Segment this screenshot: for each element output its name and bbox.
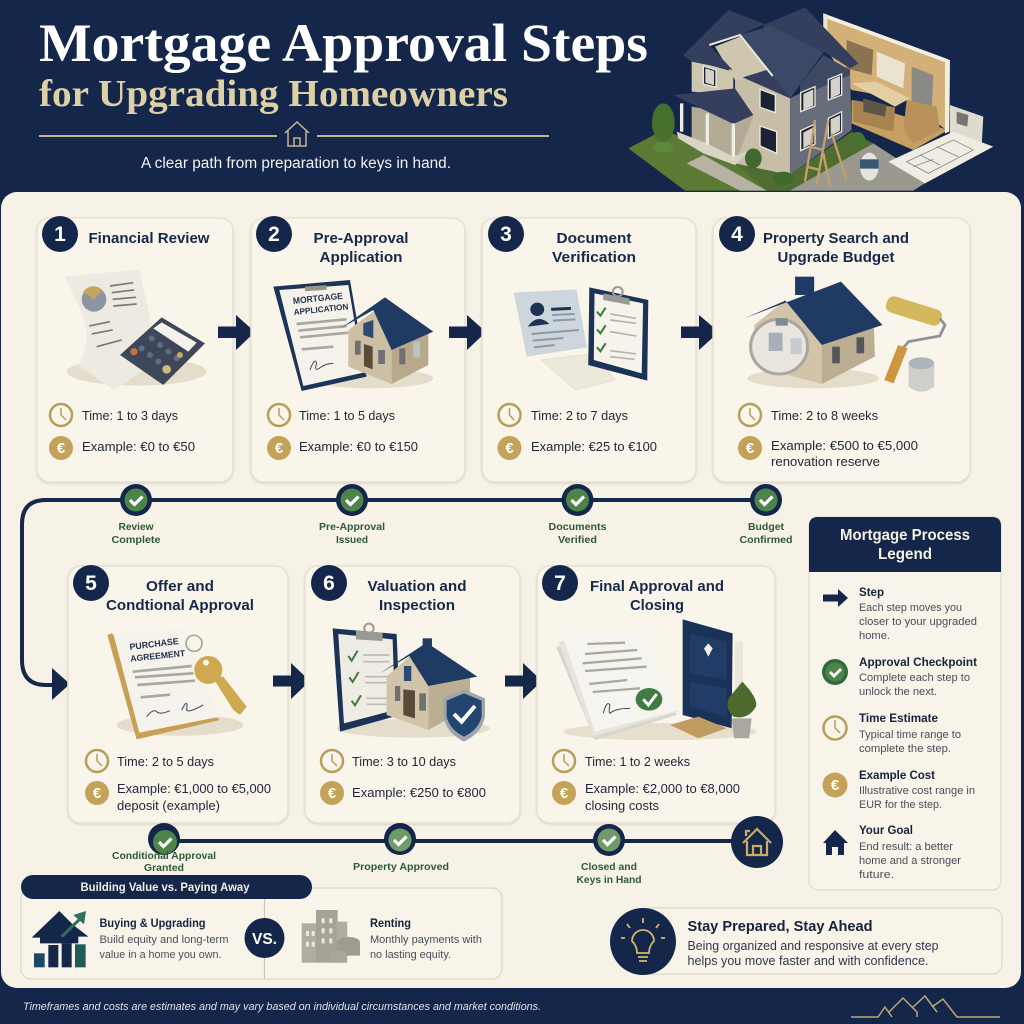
legend: example cost — [822, 768, 975, 811]
step 2 title: Pre-Approval — [314, 230, 408, 247]
panel: legend — [809, 517, 1001, 890]
step 6 title: Inspection — [379, 597, 455, 614]
vs badge: VS. — [252, 931, 277, 948]
cost: Example: €250 to €800 — [352, 785, 486, 800]
icon: clock — [553, 750, 575, 772]
renting text: no lasting equity. — [370, 949, 451, 961]
legend: approval checkpoint: Approval Checkpoint — [859, 655, 977, 669]
checkpoint: documents verified — [548, 484, 607, 546]
time: Time: 1 to 3 days — [82, 408, 178, 423]
step 1 number: 1 — [54, 223, 66, 246]
step 3 title: Document — [556, 230, 632, 247]
step 1 number — [42, 216, 78, 252]
checkpoint: documents verified: Documents — [548, 521, 607, 533]
step 7 card — [537, 565, 775, 823]
callout body: Being organized and responsive at every step — [688, 939, 939, 953]
buying text: Buying & Upgrading — [100, 918, 206, 930]
subtitle: for Upgrading Homeowners — [39, 73, 508, 115]
checkpoint: closed and keys in hand: Keys in Hand — [576, 874, 642, 886]
time: Time: 2 to 8 weeks — [771, 408, 878, 423]
legend: example cost: EUR for the step. — [859, 799, 942, 811]
tagline: A clear path from preparation to keys in hand. — [141, 155, 451, 172]
step 6 title — [368, 578, 466, 614]
cost: Example: €2,000 to €8,000 — [585, 781, 740, 796]
icon: euro: € — [746, 440, 755, 457]
step 2 number — [256, 216, 292, 252]
checkpoint: conditional approval granted — [112, 823, 216, 874]
step 3 number — [488, 216, 524, 252]
step 2 number: 2 — [268, 223, 280, 246]
step 2 title: Application — [320, 249, 402, 266]
cost — [117, 781, 271, 813]
checkpoint: review complete — [112, 484, 161, 546]
cost — [585, 781, 740, 813]
time: Time: 2 to 5 days — [117, 754, 214, 769]
checkpoint: review complete: Complete — [112, 534, 161, 546]
cost: Example: €1,000 to €5,000 — [117, 781, 271, 796]
icon: home goal — [731, 816, 783, 868]
icon: euro — [552, 781, 576, 805]
callout heading: Stay Prepared, Stay Ahead — [688, 918, 872, 935]
cost: deposit (example) — [117, 798, 220, 813]
checkpoint: review complete: Review — [118, 521, 154, 533]
checkpoint: budget confirmed: Confirmed — [740, 534, 792, 546]
icon: euro: € — [57, 440, 66, 457]
arrow: into step 5 — [52, 668, 70, 700]
step 5 number — [73, 565, 109, 601]
checkpoint: property approved: Property Approved — [353, 861, 449, 873]
icon: purchase agreement and key: PURCHASE — [129, 636, 179, 652]
comparison header: Building Value vs. Paying Away — [80, 882, 250, 894]
icon: euro: € — [505, 440, 514, 457]
legend: your goal: future. — [859, 869, 894, 881]
flow connector row 2 — [150, 839, 750, 843]
icon: euro — [267, 436, 291, 460]
arrow: step 6 to 7 — [505, 663, 542, 699]
icon: clock — [498, 404, 520, 426]
icon: clock — [321, 750, 343, 772]
legend: time estimate: Typical time range to — [859, 729, 961, 741]
legend header: Legend — [878, 546, 932, 563]
icon: application and house — [273, 280, 433, 391]
step 3 title: Verification — [552, 249, 636, 266]
icon: clock — [268, 404, 290, 426]
legend: example cost: € — [831, 777, 840, 794]
buying text: value in a home you own. — [100, 949, 222, 961]
checkpoint: budget confirmed — [740, 484, 792, 546]
checkpoint: closed and keys in hand — [576, 824, 642, 886]
renting text: Renting — [370, 918, 411, 930]
illustration: house under renovation — [628, 7, 993, 191]
legend: approval checkpoint — [822, 655, 977, 698]
icon: euro: € — [560, 785, 569, 802]
legend: step: closer to your upgraded — [859, 616, 977, 628]
time: Time: 3 to 10 days — [352, 754, 456, 769]
main cream panel — [1, 192, 1021, 988]
icon: application and house: MORTGAGE — [292, 291, 343, 306]
legend: time estimate: complete the step. — [859, 743, 951, 755]
legend: your goal: home and a stronger — [859, 855, 961, 867]
step 5 title — [106, 578, 254, 614]
step 1 card — [37, 216, 233, 482]
step 7 title: Final Approval and — [590, 578, 724, 595]
icon: euro: € — [328, 785, 337, 802]
icon: purchase agreement and key: AGREEMENT — [130, 648, 186, 664]
icon: document and calculator — [65, 269, 207, 390]
flow connector row 1 — [22, 500, 766, 685]
arrow: step 5 to 6 — [273, 663, 310, 699]
legend: step: Step — [859, 585, 884, 599]
arrow: step 2 to 3 — [449, 315, 486, 350]
arrow: step 1 to 2 — [218, 315, 255, 350]
icon: rental buildings and coins — [302, 910, 360, 963]
header — [39, 7, 993, 191]
checkpoint: closed and keys in hand: Closed and — [581, 861, 637, 873]
checkpoint: pre-approval issued — [319, 484, 385, 546]
checkpoint: budget confirmed: Budget — [748, 521, 784, 533]
icon: clock — [50, 404, 72, 426]
step 5 number: 5 — [85, 572, 97, 595]
legend: your goal — [823, 823, 961, 881]
time: Time: 2 to 7 days — [531, 408, 628, 423]
icon: euro — [49, 436, 73, 460]
vs badge — [244, 918, 284, 958]
buying text — [100, 918, 228, 961]
icon: id and checklist — [514, 287, 648, 390]
step 6 title: Valuation and — [368, 578, 466, 595]
step 4 number — [719, 216, 755, 252]
step 6 number: 6 — [323, 572, 335, 595]
step 7 title — [590, 578, 724, 614]
icon: clock — [86, 750, 108, 772]
step 4 number: 4 — [731, 223, 743, 246]
comparison header — [21, 875, 312, 899]
legend: example cost: Example Cost — [859, 768, 935, 782]
step 6 number — [311, 565, 347, 601]
icon: clipboard, house and shield — [333, 624, 490, 742]
legend: step: Each step moves you — [859, 602, 962, 614]
cost: renovation reserve — [771, 454, 880, 469]
cost: Example: €25 to €100 — [531, 439, 657, 454]
step 3 title — [552, 230, 636, 266]
time: Time: 1 to 5 days — [299, 408, 395, 423]
cost: Example: €0 to €50 — [82, 439, 195, 454]
legend: step — [823, 585, 977, 642]
checkpoint: documents verified: Verified — [558, 534, 597, 546]
step 5 title: Offer and — [146, 578, 214, 595]
icon: footer skyline — [851, 996, 1000, 1017]
step 4 title: Upgrade Budget — [778, 249, 895, 266]
cost: Example: €500 to €5,000 — [771, 438, 918, 453]
checkpoint: property approved — [353, 823, 449, 873]
step 2 card — [251, 216, 465, 482]
legend header: Mortgage Process — [840, 527, 970, 544]
legend: time estimate: Time Estimate — [859, 711, 938, 725]
icon: euro — [498, 436, 522, 460]
icon: lightbulb — [610, 908, 676, 975]
checkpoint: conditional approval granted: Granted — [144, 862, 184, 874]
icon: purchase agreement and key — [107, 628, 247, 739]
renting text: Monthly payments with — [370, 934, 482, 946]
footer disclaimer: Timeframes and costs are estimates and may vary based on individual circumstances and market conditions. — [23, 1001, 541, 1013]
cost: Example: €0 to €150 — [299, 439, 418, 454]
step 4 title: Property Search and — [763, 230, 909, 247]
renting text — [370, 918, 482, 961]
callout body: helps you move faster and with confidence. — [688, 954, 928, 968]
step 3 card — [482, 216, 696, 482]
icon: house with growth chart — [32, 911, 88, 967]
icon: euro — [320, 781, 344, 805]
step 5 title: Condtional Approval — [106, 597, 254, 614]
icon: euro — [738, 436, 762, 460]
step 2 title — [314, 230, 408, 266]
step 7 title: Closing — [630, 597, 684, 614]
icon: application and house: APPLICATION — [293, 301, 349, 317]
legend: example cost: Illustrative cost range in — [859, 785, 975, 797]
legend header — [809, 517, 1001, 572]
checkpoint: conditional approval granted: Conditional Approval — [112, 850, 216, 862]
step 7 number: 7 — [554, 572, 566, 595]
legend: approval checkpoint: unlock the next. — [859, 686, 937, 698]
icon: clock — [739, 404, 761, 426]
checkpoint: pre-approval issued: Issued — [336, 534, 368, 546]
title: Mortgage Approval Steps — [39, 13, 648, 73]
cost: closing costs — [585, 798, 659, 813]
legend: step: home. — [859, 630, 890, 642]
buying text: Build equity and long-term — [100, 934, 228, 946]
legend: time estimate — [824, 711, 961, 755]
icon: euro: € — [275, 440, 284, 457]
cost — [771, 438, 918, 469]
panel: building value vs paying away — [21, 875, 502, 979]
step 7 number — [542, 565, 578, 601]
step 6 card — [305, 565, 520, 823]
icon: euro: € — [93, 785, 102, 802]
checkpoint: pre-approval issued: Pre-Approval — [319, 521, 385, 533]
legend: approval checkpoint: Complete each step to — [859, 672, 970, 684]
icon: euro — [85, 781, 109, 805]
time: Time: 1 to 2 weeks — [585, 754, 690, 769]
legend: your goal: End result: a better — [859, 841, 953, 853]
icon: house, magnifier, paint roller — [744, 277, 945, 392]
step 5 card — [68, 565, 288, 823]
step 3 number: 3 — [500, 223, 512, 246]
legend: your goal: Your Goal — [859, 823, 913, 837]
callout body — [688, 939, 939, 968]
step 4 card — [713, 216, 970, 482]
arrow: step 3 to 4 — [681, 315, 719, 350]
callout: stay prepared — [610, 908, 1002, 975]
icon: header divider house — [39, 122, 549, 146]
step 1 title: Financial Review — [88, 230, 210, 247]
icon: documents, door and plant — [556, 619, 757, 740]
step 4 title — [763, 230, 909, 266]
